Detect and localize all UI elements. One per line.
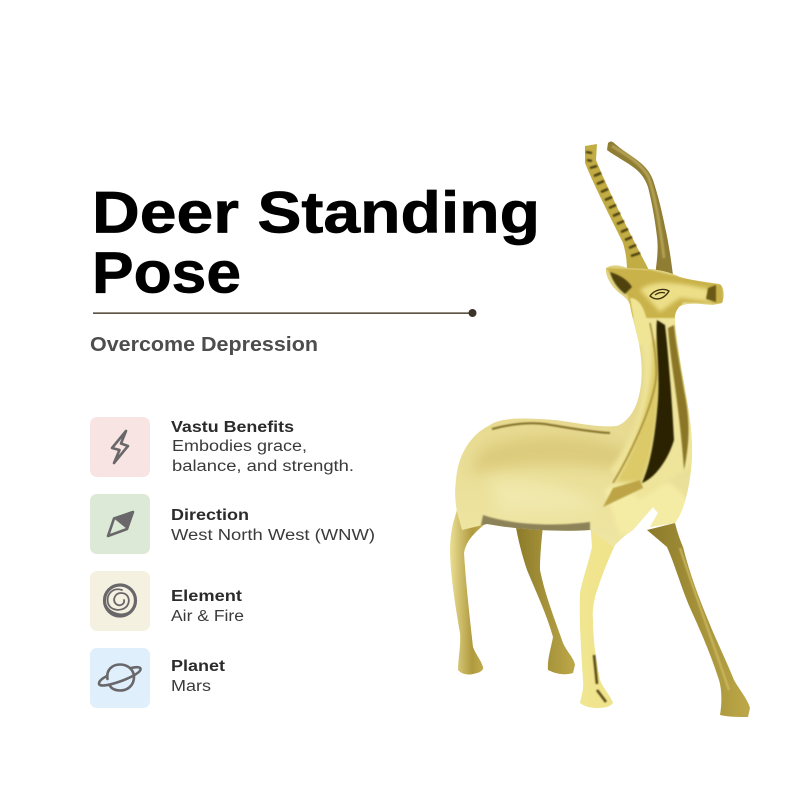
row: planet <box>90 648 225 708</box>
subtitle: Overcome Depression <box>90 334 318 356</box>
body, neck and head <box>455 265 724 547</box>
text: element <box>171 588 244 625</box>
title: Pose <box>92 240 241 306</box>
text: planet <box>171 658 225 695</box>
row: direction <box>90 494 375 554</box>
eye <box>650 289 669 299</box>
text: vastu benefits: Embodies grace, <box>172 438 307 455</box>
icon tile: ringed planet <box>90 648 150 708</box>
near horn <box>585 144 650 272</box>
neck dark stripe <box>642 320 674 483</box>
neck olive band <box>668 325 688 470</box>
front leg hoof shading <box>594 655 606 702</box>
title <box>92 180 540 306</box>
text: planet: Planet <box>171 658 225 675</box>
icon tile: lightning bolt <box>90 417 150 477</box>
back line <box>492 423 610 433</box>
near horn ridges <box>586 152 640 256</box>
text: direction <box>171 507 375 544</box>
muzzle shadow <box>706 285 716 302</box>
title: Deer Standing <box>92 180 540 246</box>
shoulder crease <box>613 323 656 483</box>
text: element: Element <box>171 588 242 605</box>
front leg <box>580 520 630 708</box>
far horn highlight <box>612 146 664 258</box>
icon tile: compass <box>90 494 150 554</box>
head gold <box>606 268 724 318</box>
text: planet: Mars <box>171 678 211 695</box>
far rear leg <box>647 523 750 717</box>
text: direction: West North West (WNW) <box>171 527 375 544</box>
shoulder wedge <box>603 480 643 507</box>
text: vastu benefits <box>171 419 354 475</box>
far rear leg highlight <box>680 548 729 690</box>
body reflections <box>470 436 630 475</box>
text: vastu benefits: Vastu Benefits <box>171 419 294 436</box>
text: direction: Direction <box>171 507 249 524</box>
row: vastu benefits <box>90 417 354 477</box>
text: vastu benefits: balance, and strength. <box>172 458 354 475</box>
far horn <box>607 142 673 275</box>
illustration: brass deer <box>440 142 750 717</box>
text: element: Air & Fire <box>171 608 244 625</box>
back-left leg <box>450 510 490 675</box>
row: element <box>90 571 244 631</box>
icon tile: air spiral <box>90 571 150 631</box>
neck light <box>612 304 692 497</box>
shoulder soft fill <box>616 340 659 482</box>
belly shadow <box>480 514 591 531</box>
ear shadow <box>610 272 632 294</box>
title underline with dot <box>93 309 476 317</box>
rear-left leg <box>515 522 575 674</box>
